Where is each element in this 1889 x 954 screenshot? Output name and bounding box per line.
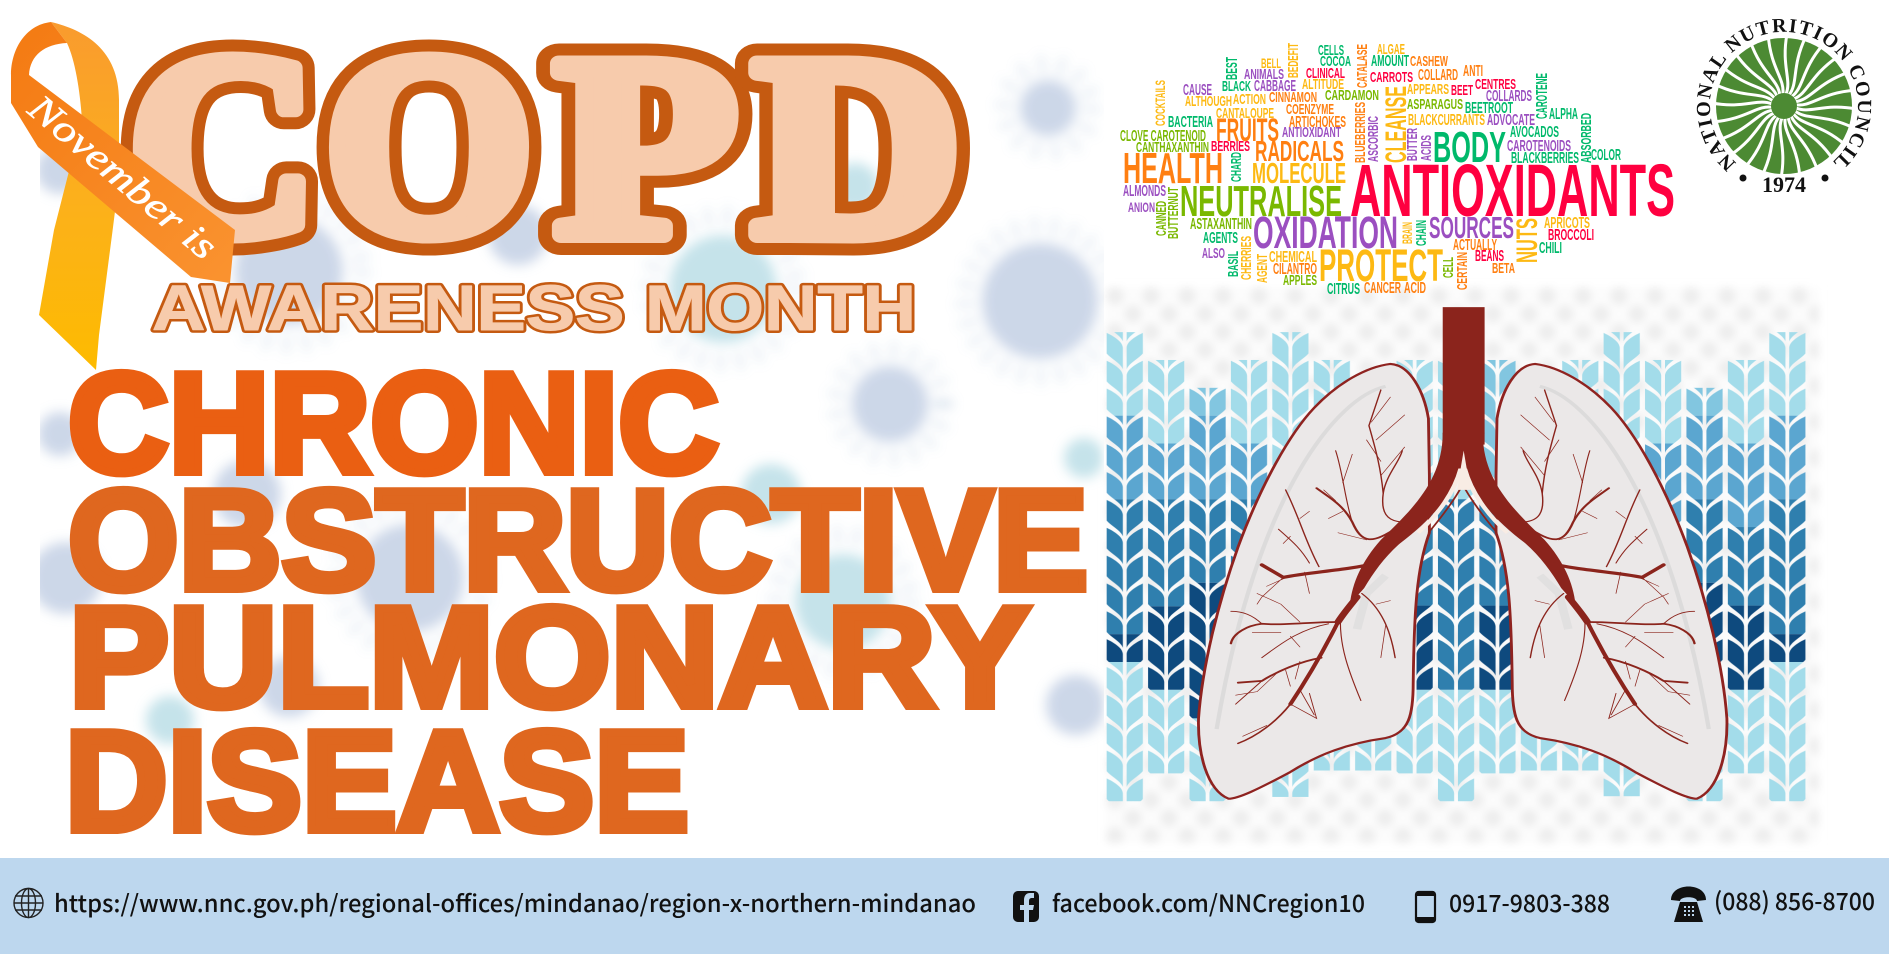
word cloud: antioxidants: ABSORBED	[1578, 113, 1595, 163]
word cloud: antioxidants: CELLS	[1318, 42, 1344, 59]
word cloud: antioxidants: CANNED	[1153, 201, 1170, 236]
word cloud: antioxidants	[1120, 41, 1675, 298]
word cloud: antioxidants: BLUEBERRIES	[1352, 102, 1369, 163]
word cloud: antioxidants: ANTIOXIDANT	[1282, 124, 1341, 141]
word cloud: antioxidants: CHILI	[1539, 240, 1562, 257]
mobile number: 0917-9803-388	[1449, 884, 1610, 919]
word cloud: antioxidants: ACIDS	[1418, 135, 1435, 161]
word cloud: antioxidants: PROTECT	[1319, 240, 1443, 291]
word cloud: antioxidants: ACTUALLY	[1453, 237, 1497, 254]
title: COPD: D	[752, 2, 962, 292]
word cloud: antioxidants: BEDEFIT	[1285, 43, 1302, 78]
word cloud: antioxidants: BLACKCURRANTS	[1408, 112, 1485, 129]
word cloud: antioxidants: CABBAGE	[1254, 78, 1296, 95]
lungs illustration on knit pattern	[1106, 307, 1810, 801]
word cloud: antioxidants: BUTTER	[1404, 128, 1421, 161]
title: COPD: O	[324, 0, 534, 290]
heading: AWARENESS MONTH: AWARENESS MONTH	[152, 272, 916, 344]
word cloud: antioxidants: CANCER	[1364, 280, 1401, 297]
word cloud: antioxidants: CHAIN	[1413, 220, 1430, 246]
title: COPD: C	[128, 0, 318, 290]
landline number: (088) 856-8700	[1714, 882, 1875, 917]
word cloud: antioxidants: CATALASE	[1354, 44, 1371, 88]
word cloud: antioxidants: BERRIES	[1211, 138, 1250, 155]
word cloud: antioxidants: SOURCES	[1429, 210, 1514, 245]
word cloud: antioxidants: APPLES	[1283, 272, 1317, 289]
website link: https://www.nnc.gov.ph/regional-offices/mindanao/region-x-northern-mindanao	[54, 884, 976, 919]
title: COPD	[128, 0, 962, 292]
word cloud: antioxidants: COLLARDS	[1486, 88, 1532, 105]
heading: Chronic Obstructive Pulmonary Disease: DISEASE	[65, 702, 689, 861]
word cloud: antioxidants: FRUITS	[1216, 112, 1279, 148]
word cloud: antioxidants: ACID	[1404, 280, 1426, 297]
word cloud: antioxidants: CHARD	[1228, 152, 1245, 182]
word cloud: antioxidants: NUTS	[1511, 218, 1544, 263]
word cloud: antioxidants: BROCCOLI	[1548, 227, 1594, 244]
word cloud: antioxidants: ARTICHOKES	[1289, 114, 1346, 131]
word cloud: antioxidants: CLEANSE	[1380, 86, 1413, 163]
word cloud: antioxidants: ADVOCATE	[1487, 112, 1535, 129]
word cloud: antioxidants: CAUSE	[1183, 82, 1212, 99]
word cloud: antioxidants: BLACKBERRIES	[1511, 150, 1579, 167]
icon: telephone	[1671, 886, 1706, 922]
word cloud: antioxidants: COCKTAILS	[1152, 80, 1168, 126]
word cloud: antioxidants: CHERRIES	[1238, 236, 1255, 280]
title: COPD: O	[324, 0, 534, 290]
word cloud: antioxidants: ACTION	[1233, 91, 1266, 108]
word cloud: antioxidants: ANION	[1128, 199, 1155, 215]
word cloud: antioxidants: COLLARD	[1418, 67, 1458, 84]
word cloud: antioxidants: BLACK	[1222, 78, 1251, 95]
word cloud: antioxidants: BRAIN	[1399, 222, 1415, 244]
facebook handle: facebook.com/NNCregion10	[1052, 884, 1365, 919]
title: COPD: P	[554, 2, 738, 292]
word cloud: antioxidants: ANTIOXIDANTS	[1350, 149, 1675, 232]
word cloud: antioxidants: AGENTS	[1203, 230, 1238, 247]
title: COPD: P	[554, 2, 738, 292]
word cloud: antioxidants: BASIL	[1225, 251, 1242, 277]
word cloud: antioxidants: AGENT	[1254, 254, 1271, 283]
word cloud: antioxidants: CLOVE CAROTENOID	[1120, 128, 1206, 145]
word cloud: antioxidants: CENTRES	[1475, 76, 1516, 93]
word cloud: antioxidants: BUTTERNUT	[1165, 187, 1182, 239]
title: COPD: C	[128, 0, 318, 290]
word cloud: antioxidants: CARROTS	[1370, 69, 1413, 86]
word cloud: antioxidants: ALPHA	[1549, 106, 1578, 123]
word cloud: antioxidants: CAROTENOIDS	[1507, 138, 1571, 155]
heading: Chronic Obstructive Pulmonary Disease: OBSTRUCTIVE	[68, 461, 1088, 620]
word cloud: antioxidants: AMOUNT	[1371, 53, 1409, 70]
word cloud: antioxidants: COCOA	[1320, 53, 1351, 70]
word cloud: antioxidants: ALSO	[1202, 245, 1225, 262]
word cloud: antioxidants: CILANTRO	[1273, 261, 1317, 278]
word cloud: antioxidants: APPEARS	[1407, 81, 1449, 98]
word cloud: antioxidants: NEUTRALISE	[1180, 177, 1342, 226]
word cloud: antioxidants: APRICOTS	[1544, 215, 1590, 232]
icon: awareness ribbon with November is	[11, 22, 235, 370]
footer band	[0, 858, 1889, 954]
word cloud: antioxidants: CINNAMON	[1269, 89, 1317, 106]
word cloud: antioxidants: BEET	[1451, 82, 1473, 99]
heading: AWARENESS MONTH: AWARENESS MONTH	[152, 272, 916, 344]
icon: globe	[14, 888, 43, 918]
word cloud: antioxidants: ASCORBIC	[1365, 116, 1382, 162]
word cloud: antioxidants: ASTAXANTHIN	[1190, 216, 1252, 233]
word cloud: antioxidants: BODY	[1433, 123, 1506, 172]
word cloud: antioxidants: CANTHAXANTHIN	[1136, 139, 1209, 156]
word cloud: antioxidants: AVOCADOS	[1510, 124, 1559, 141]
word cloud: antioxidants: OXIDATION	[1253, 207, 1398, 258]
logo: National Nutrition Council: NATIONAL NUTRITION COUNCIL	[1696, 19, 1872, 172]
icon: awareness ribbon with November is: November is	[19, 86, 225, 268]
word cloud: antioxidants: ALMONDS	[1123, 183, 1166, 200]
icon: mobile phone	[1416, 892, 1435, 922]
word cloud: antioxidants: BELL	[1261, 55, 1281, 71]
title: COPD: D	[752, 2, 962, 292]
word cloud: antioxidants: ALTITUDE	[1302, 76, 1344, 93]
icon: facebook	[1013, 891, 1039, 922]
word cloud: antioxidants: CARDAMON	[1325, 87, 1379, 104]
word cloud: antioxidants: RADICALS	[1255, 136, 1344, 168]
word cloud: antioxidants: BACTERIA	[1168, 114, 1213, 131]
word cloud: antioxidants: ANIMALS	[1244, 66, 1284, 83]
logo: National Nutrition Council: 1974	[1762, 172, 1806, 197]
word cloud: antioxidants: BEST	[1224, 57, 1241, 80]
word cloud: antioxidants: COENZYME	[1286, 101, 1334, 118]
word cloud: antioxidants: CLINICAL	[1306, 65, 1345, 82]
word cloud: antioxidants: CASHEW	[1410, 53, 1448, 70]
background: blurred virus pattern	[30, 66, 1114, 744]
word cloud: antioxidants: CAROTENE	[1534, 73, 1551, 119]
word cloud: antioxidants: ASPARAGUS	[1407, 96, 1463, 113]
word cloud: antioxidants: ALTHOUGH	[1185, 93, 1232, 110]
word cloud: antioxidants: BETA	[1492, 260, 1515, 277]
word cloud: antioxidants: CERTAIN	[1454, 252, 1471, 290]
word cloud: antioxidants: HEALTH	[1123, 144, 1223, 193]
word cloud: antioxidants: MOLECULE	[1252, 158, 1346, 190]
word cloud: antioxidants: ANTI	[1463, 63, 1483, 80]
word cloud: antioxidants: COLOR	[1591, 147, 1621, 164]
word cloud: antioxidants: ALGAE	[1377, 41, 1405, 58]
word cloud: antioxidants: BEETROOT	[1465, 100, 1513, 117]
word cloud: antioxidants: CELL	[1440, 257, 1457, 278]
heading: Chronic Obstructive Pulmonary Disease	[65, 344, 1088, 861]
word cloud: antioxidants: BEANS	[1475, 248, 1504, 265]
panel: checker background behind lungs	[1106, 287, 1819, 843]
heading: Chronic Obstructive Pulmonary Disease: PULMONARY	[69, 578, 1030, 737]
word cloud: antioxidants: CANTALOUPE	[1216, 105, 1274, 122]
heading: Chronic Obstructive Pulmonary Disease: CHRONIC	[68, 344, 719, 503]
word cloud: antioxidants: CITRUS	[1327, 281, 1360, 298]
word cloud: antioxidants: CHEMICAL	[1269, 249, 1317, 266]
